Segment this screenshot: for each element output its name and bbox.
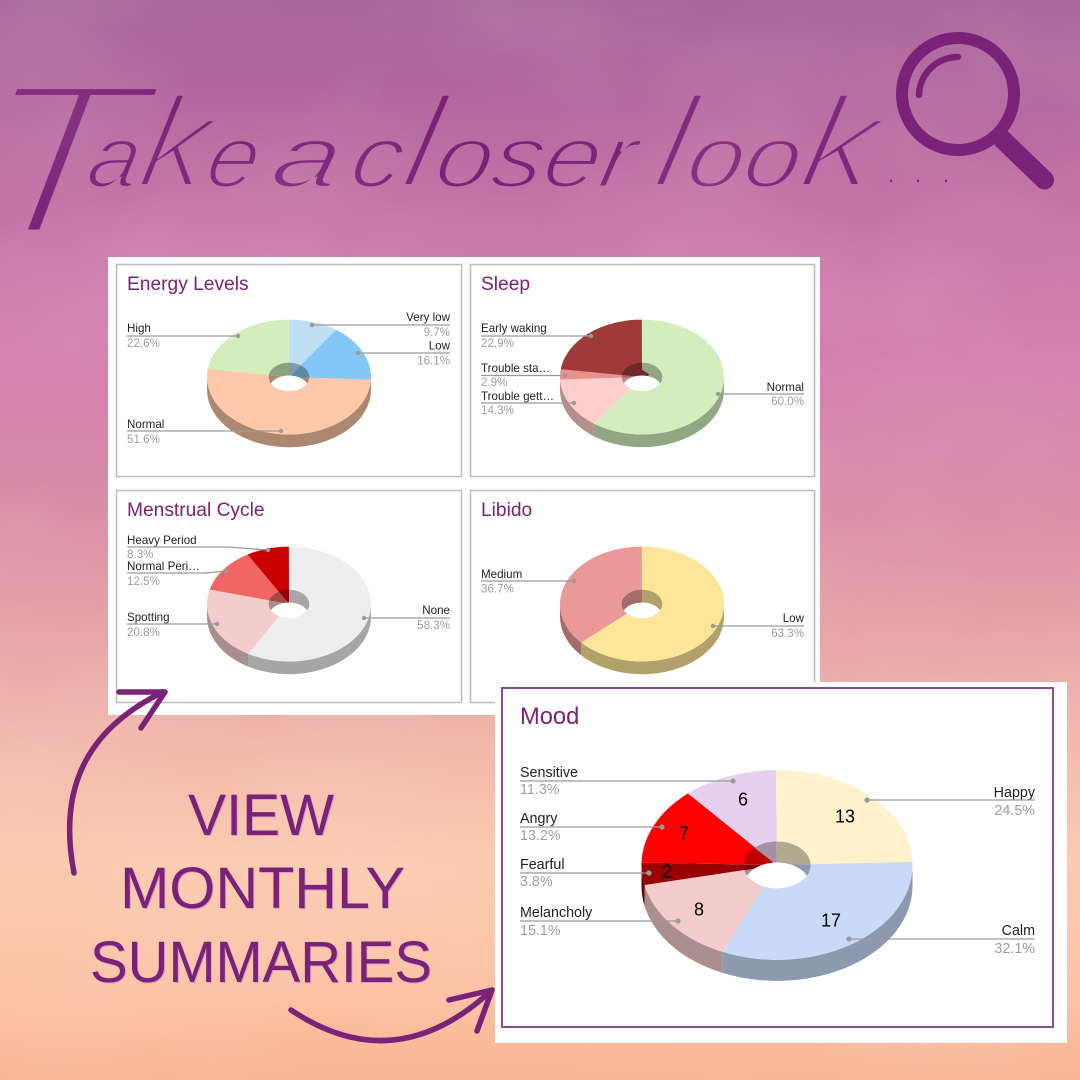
label: happy: Happy (994, 785, 1036, 801)
label: very low: Very low (406, 311, 451, 324)
label: calm: 32.1% (994, 941, 1035, 957)
chart: libido pie (560, 568, 724, 674)
label: happy: 24.5% (994, 803, 1035, 819)
slice values (662, 790, 855, 930)
label: spotting: 20.8% (127, 626, 160, 639)
label: normal: Normal (767, 381, 804, 394)
text block: view monthly summaries: VIEW (188, 783, 334, 848)
label: fearful (520, 857, 652, 890)
label: spotting: Spotting (127, 611, 170, 624)
title: Take a closer look: closer (341, 69, 657, 215)
chart: energy pie (207, 341, 371, 447)
label: low (356, 340, 451, 368)
heading: libido: Libido (481, 500, 532, 521)
icon: magnifying glass (902, 38, 1044, 180)
label: normal (127, 418, 283, 446)
label: heavy period: Heavy Period (127, 534, 197, 547)
label: heavy period: 8.3% (127, 548, 153, 561)
slice values: 8 (694, 900, 704, 920)
label: calm (846, 923, 1035, 957)
label: melancholy: 15.1% (520, 923, 561, 939)
chart: sleep pie (560, 341, 724, 447)
text block: view monthly summaries: SUMMARIES (90, 930, 432, 995)
slice values: 17 (821, 910, 841, 930)
slice values: 13 (835, 806, 855, 826)
label: none (362, 604, 450, 632)
label: high: 22.6% (127, 337, 160, 350)
label: heavy period (127, 534, 270, 561)
label: angry (520, 811, 665, 844)
label: sensitive (520, 765, 736, 798)
label: angry: 13.2% (520, 828, 561, 844)
title: Take a closer look: ake (78, 69, 278, 215)
chart: mood pie (642, 806, 913, 981)
panel: energy levels (116, 264, 462, 476)
text block: view monthly summaries (90, 783, 432, 995)
label: very low: 9.7% (424, 326, 450, 339)
label: high (127, 322, 240, 350)
title: Take a closer look (0, 37, 949, 282)
panel: libido (470, 490, 814, 702)
slice values: 7 (679, 824, 689, 844)
slice values: 6 (738, 790, 748, 810)
label: angry: Angry (520, 811, 558, 827)
label: fearful: Fearful (520, 857, 564, 873)
heading: mood: Mood (520, 704, 579, 730)
label: trouble getting: Trouble gett… (481, 390, 554, 403)
label: high: High (127, 322, 151, 335)
label: low: Low (783, 612, 805, 625)
label: normal: 51.6% (127, 433, 160, 446)
label: sensitive: 11.3% (520, 782, 560, 798)
label: medium (481, 568, 576, 596)
label: trouble staying: 2.9% (481, 376, 507, 389)
label: low: 63.3% (771, 627, 804, 640)
arrow: up to dashboard (70, 692, 165, 873)
label: normal (716, 381, 804, 408)
label: medium: Medium (481, 568, 522, 581)
label: melancholy: Melancholy (520, 905, 593, 921)
heading: energy levels: Energy Levels (127, 274, 249, 295)
label: early waking: Early waking (481, 322, 547, 335)
heading: sleep: Sleep (481, 274, 530, 295)
label: medium: 36.7% (481, 582, 514, 596)
panel: sleep (470, 264, 814, 476)
heading: menstrual cycle: Menstrual Cycle (127, 500, 265, 521)
panel: dashboard card with four charts (108, 257, 820, 715)
title: Take a closer look: ... (888, 162, 949, 187)
label: normal: 60.0% (771, 395, 804, 408)
label: normal period: Normal Peri… (127, 560, 200, 573)
label: calm: Calm (1002, 923, 1035, 939)
title: Take a closer look: a (264, 108, 352, 206)
label: sensitive: Sensitive (520, 765, 578, 781)
label: trouble getting (481, 390, 576, 417)
label: trouble staying: Trouble sta… (481, 362, 550, 375)
label: trouble getting: 14.3% (481, 404, 514, 417)
label: normal period: 12.5% (127, 575, 160, 588)
label: normal: Normal (127, 418, 164, 431)
label: low: Low (429, 340, 451, 352)
label: trouble staying (481, 362, 567, 389)
label: normal period (127, 560, 228, 588)
label: low: 16.1% (417, 354, 450, 368)
chart: menstrual pie (207, 568, 371, 674)
panel: mood card (495, 682, 1067, 1043)
label: happy (864, 785, 1036, 819)
label: fearful: 3.8% (520, 874, 553, 890)
arrow: right to mood card (291, 990, 492, 1041)
text block: view monthly summaries: MONTHLY (120, 856, 405, 921)
label: very low (310, 311, 451, 339)
label: melancholy (520, 905, 681, 939)
label: spotting (127, 611, 219, 639)
label: low (711, 612, 805, 640)
label: none: 58.3% (417, 619, 450, 632)
slice values: 2 (662, 862, 672, 882)
label: early waking: 22.9% (481, 337, 514, 350)
label: none: None (422, 604, 450, 617)
panel: menstrual cycle (116, 490, 462, 702)
title: Take a closer look: look (644, 69, 902, 215)
label: early waking (481, 322, 593, 350)
